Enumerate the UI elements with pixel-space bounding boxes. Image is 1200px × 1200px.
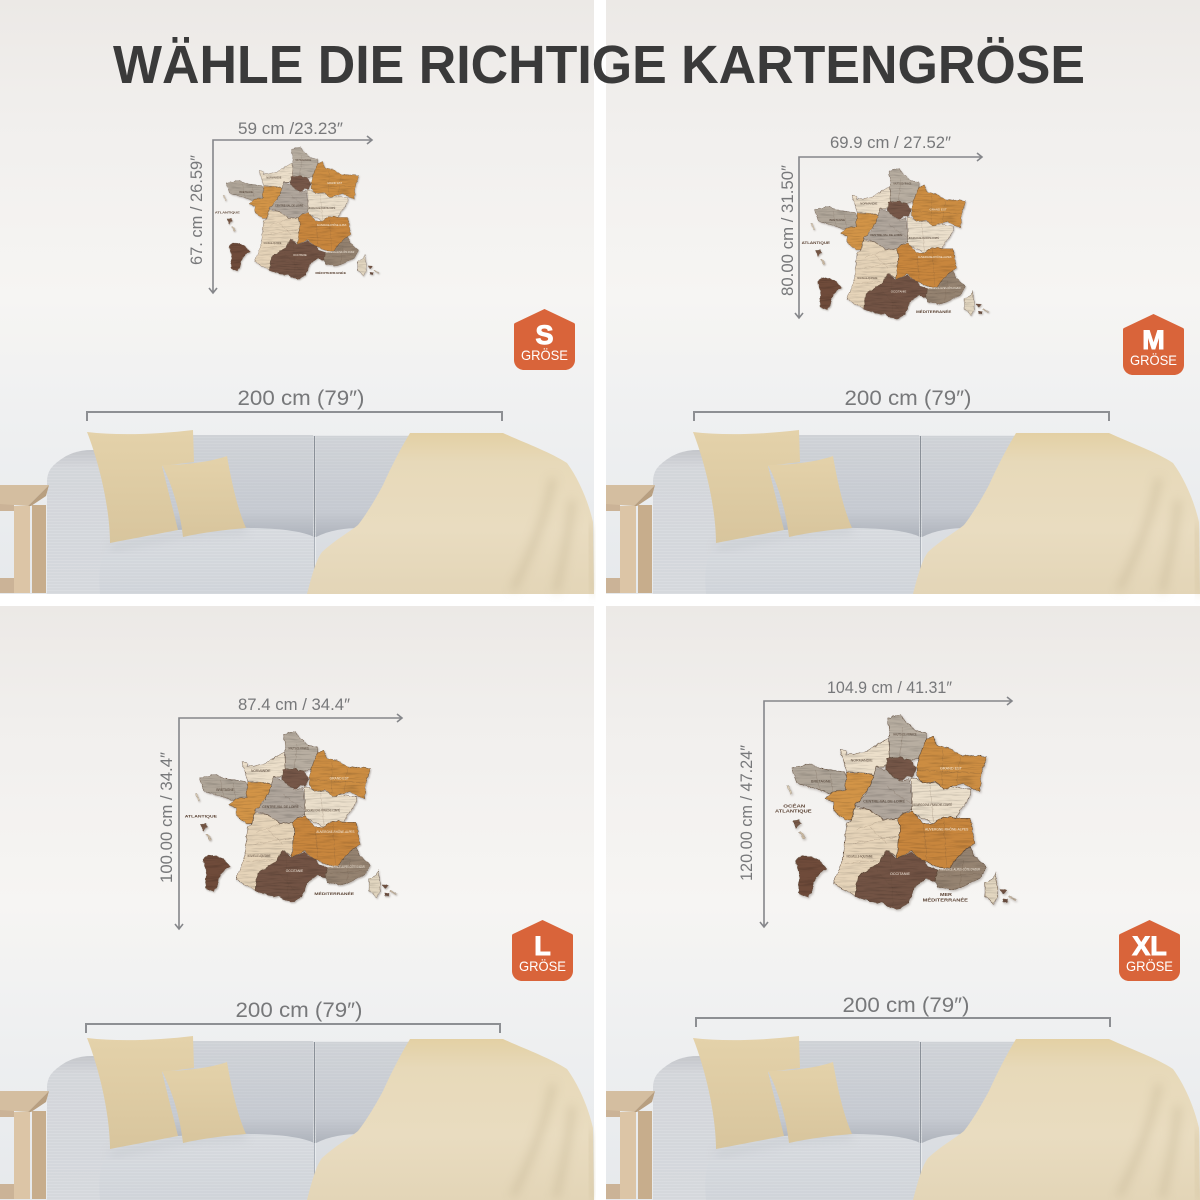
sofa width bracket S: 200 cm (79″) (238, 387, 364, 410)
map of France M (802, 168, 989, 320)
map of France XL (775, 714, 1017, 910)
sofa scene L (0, 1036, 594, 1200)
map of France XL: CENTRE-VAL DE LOIRE (863, 799, 906, 803)
map of France XL: BRETAGNE (811, 780, 832, 784)
size badge M (1123, 314, 1184, 375)
map of France XL: BOURGOGNE-FRANCHE-COMTÉ (913, 802, 952, 807)
map of France S: NOUVELLE-AQUITAINE (264, 242, 282, 245)
panel: size L (0, 606, 594, 1200)
wall background L (0, 606, 594, 1200)
sofa width bracket S (87, 387, 502, 421)
map of France L: PROVENCE-ALPES-CÔTE D'AZUR (328, 864, 365, 869)
map of France L: CENTRE-VAL DE LOIRE (262, 805, 299, 809)
dimension arrows XL: 104.9 cm / 41.31″ (827, 678, 952, 697)
map of France L: BOURGOGNE-FRANCHE-COMTÉ (306, 807, 340, 812)
map of France L: MÉDITERRANÉE (314, 891, 355, 896)
panel: size S (0, 0, 594, 594)
map of France XL: PROVENCE-ALPES-CÔTE D'AZUR (938, 867, 980, 872)
sofa width bracket XL: 200 cm (79″) (842, 994, 970, 1017)
map of France S: BOURGOGNE-FRANCHE-COMTÉ (309, 207, 336, 210)
sofa width bracket M: 200 cm (79″) (844, 387, 972, 410)
map of France M: NOUVELLE-AQUITAINE (857, 276, 877, 280)
map of France L: ATLANTIQUE (185, 814, 218, 818)
sofa width bracket L (86, 999, 500, 1033)
map of France S: ATLANTIQUE (215, 211, 240, 215)
size badge XL (1119, 920, 1180, 981)
map of France XL: MÉDITERRANÉE (923, 897, 968, 902)
map of France L: OCCITANIE (286, 869, 303, 873)
dimension arrows S: 59 cm /23.23″ (238, 119, 343, 138)
dimension arrows S: 67. cm / 26.59″ (187, 155, 206, 265)
map of France XL: ATLANTIQUE (775, 809, 812, 814)
map of France L: NORMANDIE (251, 769, 270, 773)
map of France S: BRETAGNE (239, 191, 253, 194)
map of France S: MÉDITERRANÉE (315, 270, 346, 275)
size badge S (514, 309, 575, 370)
map of France M: BOURGOGNE-FRANCHE-COMTÉ (909, 235, 939, 240)
panel: size XL (606, 606, 1200, 1200)
title: WÄHLE DIE RICHTIGE KARTENGRÖSE (113, 35, 1085, 95)
sofa scene S (0, 430, 594, 594)
map of France XL: HAUTS-DE-FRANCE (893, 733, 917, 737)
map of France L: AUVERGNE-RHÔNE-ALPES (316, 829, 354, 834)
sofa scene M (606, 430, 1200, 594)
wall background M (606, 0, 1200, 594)
map of France S: CENTRE-VAL DE LOIRE (275, 204, 304, 207)
map of France M: PROVENCE-ALPES-CÔTE D'AZUR (928, 285, 961, 290)
map of France M: ATLANTIQUE (802, 241, 831, 245)
dimension arrows XL: 120.00 cm / 47.24″ (737, 745, 756, 881)
sofa width bracket L: 200 cm (79″) (236, 999, 362, 1022)
map of France XL: OCÉAN (783, 803, 805, 808)
map of France L: BRETAGNE (216, 788, 234, 792)
map of France S (215, 147, 379, 280)
map of France L: NOUVELLE-AQUITAINE (248, 854, 270, 858)
dimension arrows M: 80.00 cm / 31.50″ (778, 165, 797, 296)
map of France M: GRAND EST (930, 208, 947, 212)
map of France L: HAUTS-DE-FRANCE (289, 747, 309, 751)
size badge M: M (1142, 325, 1165, 355)
size badge L: GRÖSE (519, 957, 566, 974)
dimension arrows L (157, 695, 402, 929)
map of France M: OCCITANIE (891, 290, 906, 294)
map of France M: HAUTS-DE-FRANCE (893, 182, 912, 186)
size badge S: S (535, 320, 554, 350)
panel: size M (606, 0, 1200, 594)
map of France S: HAUTS-DE-FRANCE (295, 159, 311, 162)
size badge L: L (534, 931, 551, 961)
map of France S: GRAND EST (327, 182, 343, 185)
map of France S: NORMANDIE (266, 177, 282, 180)
map of France M: CENTRE-VAL DE LOIRE (870, 233, 903, 237)
map of France M: NORMANDIE (860, 201, 877, 205)
dimension arrows S (187, 119, 372, 293)
dimension arrows M: 69.9 cm / 27.52″ (830, 133, 951, 152)
map of France L (185, 731, 397, 903)
map of France S: PROVENCE-ALPES-CÔTE D'AZUR (326, 251, 354, 254)
map of France S: AUVERGNE-RHÔNE-ALPES (317, 224, 347, 227)
map of France XL: OCCITANIE (890, 872, 911, 876)
map of France M: BRETAGNE (830, 218, 845, 222)
map of France M: MÉDITERRANÉE (916, 309, 952, 314)
dimension arrows XL (737, 678, 1012, 927)
map of France XL: NORMANDIE (851, 758, 873, 762)
size badge L (512, 920, 573, 981)
map of France XL: NOUVELLE-AQUITAINE (847, 855, 873, 859)
sofa scene XL (606, 1036, 1200, 1200)
size badge S: GRÖSE (521, 346, 568, 363)
dimension arrows L: 87.4 cm / 34.4″ (238, 695, 350, 714)
map of France L: GRAND EST (330, 776, 349, 780)
map of France XL: GRAND EST (940, 766, 963, 770)
size badge M: GRÖSE (1130, 351, 1177, 368)
size badge XL: XL (1132, 931, 1167, 961)
map of France M: AUVERGNE-RHÔNE-ALPES (918, 254, 952, 259)
sofa width bracket M (694, 387, 1109, 421)
wall background XL (606, 606, 1200, 1200)
size badge XL: GRÖSE (1126, 957, 1173, 974)
map of France S: OCCITANIE (293, 254, 307, 257)
dimension arrows L: 100.00 cm / 34.4″ (157, 752, 176, 883)
map of France XL: MER (940, 892, 953, 897)
wall background S (0, 0, 594, 594)
map of France XL: AUVERGNE-RHÔNE-ALPES (925, 827, 969, 832)
sofa width bracket XL (696, 994, 1110, 1027)
dimension arrows M (778, 133, 982, 318)
